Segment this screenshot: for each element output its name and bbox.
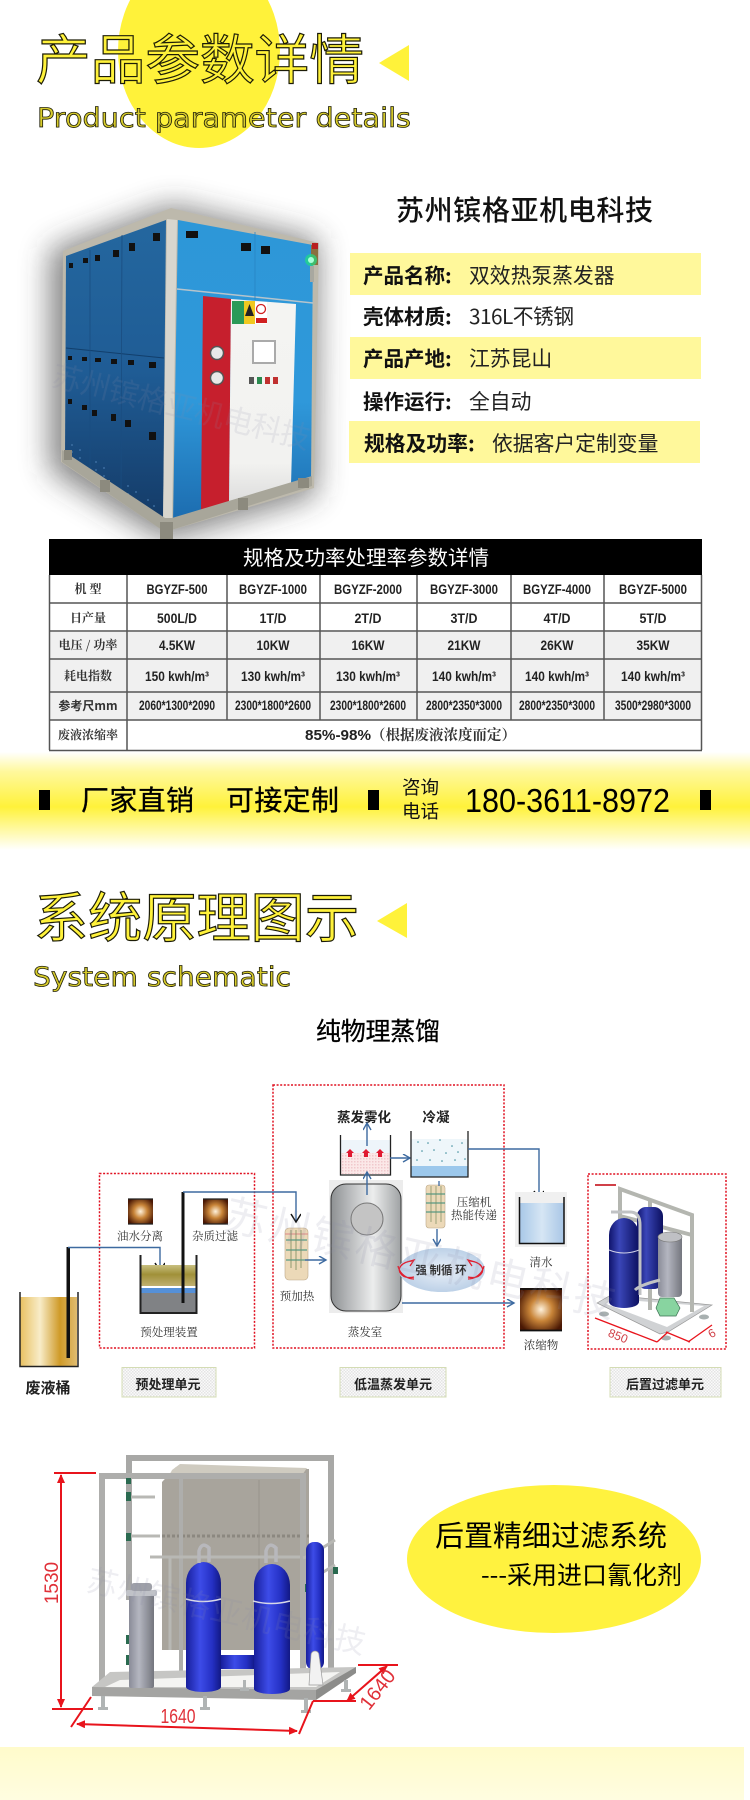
row: power consumption: 130 kwh/m³ [241,669,305,684]
arrow: preheater to evaporator [305,1259,326,1261]
row: power consumption: 130 kwh/m³ [336,669,400,684]
gray filter cylinder [658,1235,682,1297]
subtitle: system schematic: System schematic [33,962,291,993]
row: spec and power: 依据客户定制变量 [492,427,658,457]
parameter table [49,539,702,750]
contact banner [0,752,750,850]
base and feet [62,450,312,540]
row: spec and power: 规格及功率: [364,427,475,457]
row: daily output: 5T/D [640,611,667,626]
title: product parameter details: 产品参数详情 [36,16,364,95]
row: reference size [58,697,691,714]
row: daily output [70,609,667,626]
post filter machine [595,1185,719,1346]
decorative yellow circle [118,0,280,148]
row: voltage and power: 4.5KW [159,638,195,653]
flow line: condenser to clean water [468,1149,539,1199]
row: origin: 江苏昆山 [469,342,552,372]
row: concentration rate [58,724,516,745]
right blue face [173,220,313,523]
cabinet frame [61,208,319,532]
row: model: BGYZF-1000 [239,582,307,597]
upright frame [620,1189,692,1312]
product photo: evaporator cabinet [50,205,319,540]
row: power consumption: 140 kwh/m³ [621,669,685,684]
pressure gauges [210,346,224,384]
row: daily output: 500L/D [157,611,197,626]
watermarks: 苏州镔格亚机电科技 [83,1555,371,1663]
icon: title triangle [379,45,409,81]
row: reference size: 2800*2350*3000 [519,698,595,713]
row: operation [363,385,531,415]
waste liquid bucket: 废液桶 [25,1377,71,1398]
callout ellipse: post fine filter system [407,1485,701,1633]
gray filter column [126,1583,157,1688]
forced circulation ellipse: 强 制循 环 [415,1262,467,1278]
compressor heat transfer: 热能传递 [451,1207,497,1223]
row: reference size: 2300*1800*2600 [330,698,406,713]
signal tower light [305,243,318,282]
pretreatment tank: 预处理装置 [140,1324,198,1340]
row: product name: 双效热泵蒸发器 [469,259,615,289]
row: power consumption: 耗电指数 [64,667,112,684]
clean water tank: 清水 [530,1254,553,1270]
condenser: 冷凝 [422,1106,450,1126]
base frame [597,1295,712,1334]
row: voltage and power: 10KW [256,638,290,653]
callout ellipse: post fine filter system: 后置精细过滤系统 [435,1513,667,1555]
compressor heat transfer: 压缩机 [457,1194,492,1210]
left blue cylinder [186,1545,221,1692]
bottom pale yellow band [0,1747,744,1800]
evaporation chamber: 蒸发室 [348,1324,382,1340]
arrow: to concentrate [402,1302,514,1304]
row: origin: 产品产地: [363,342,452,372]
evaporation chamber [329,1180,403,1340]
phone number: 180-3611-8972 [465,782,670,819]
heading: pure physical distillation: 纯物理蒸馏 [316,1012,440,1048]
arrow: compressor down [436,1229,438,1246]
row: product name: 产品名称: [363,259,452,289]
table grid [49,575,702,750]
row: reference size: 3500*2980*3000 [615,698,691,713]
row: model: BGYZF-2000 [334,582,402,597]
process diagram [20,1085,726,1398]
row: reference size: 2060*1300*2090 [139,698,215,713]
row: model [74,580,687,597]
row: reference size: 参考尺mm [58,697,118,714]
row: power consumption [64,667,685,684]
row: voltage and power: 35KW [636,638,670,653]
banner slogan: 可接定制 [226,779,339,819]
control buttons [249,377,278,384]
post filter machine: 850 [606,1326,630,1346]
side pipes [127,1497,335,1650]
width dimension 1640 [71,1697,313,1734]
depth dimension 1640: 1640 [356,1666,400,1714]
impurity filter icon [192,1199,238,1244]
concentrate icon [520,1288,562,1353]
table header: 规格及功率处理率参数详情 [243,541,489,571]
row: product name [350,253,701,295]
machine shadow [50,205,318,540]
banner slogan: 厂家直销 [81,779,194,819]
row: daily output: 1T/D [260,611,287,626]
watermarks [48,351,623,1663]
banner bullets [39,790,711,810]
company name: 苏州镔格亚机电科技 [396,189,653,229]
row: power consumption: 150 kwh/m³ [145,669,209,684]
watermarks: 苏州镔格亚机电科技 [48,351,316,458]
row: model: 机 型 [74,580,102,597]
rear blue tank [637,1207,663,1289]
green pump [656,1298,680,1316]
red door panel [201,296,231,511]
icon: section triangle [377,903,407,938]
white pump [309,1651,323,1685]
watermarks: 苏州镔格亚机电科技 [219,1181,623,1331]
pretreatment dotted frame [100,1174,254,1348]
concentrate icon: 浓缩物 [524,1337,559,1353]
row: daily output: 4T/D [544,611,571,626]
row: shell material [363,300,574,330]
preheater: 预加热 [280,1288,315,1304]
post filter dotted frame [588,1174,726,1349]
subtitle: english: Product parameter details [37,103,411,134]
flow line: tank to preheater [183,1192,296,1222]
condenser [411,1106,468,1177]
row: operation: 全自动 [469,385,531,415]
row: daily output: 3T/D [450,611,478,626]
consult label: 电话 [402,798,439,824]
row: model: BGYZF-4000 [523,582,591,597]
unit label: post filter: 后置过滤单元 [626,1374,704,1393]
pipes [611,1212,660,1295]
evaporation atomizing chamber: 蒸发雾化 [337,1106,391,1126]
base platform [92,1667,356,1700]
row: shell material: 壳体材质: [363,300,452,330]
right blue cylinder [253,1545,290,1694]
green valves [126,1478,338,1665]
row: daily output: 2T/D [354,611,382,626]
main blue tank [609,1218,639,1308]
row: voltage and power [59,636,670,653]
row: voltage and power: 16KW [352,638,385,653]
banner slogan [81,779,339,819]
flow line: bucket to tank [68,1248,160,1271]
row: voltage and power: 电压 / 功率 [59,636,118,653]
unit label: post filter [610,1368,721,1397]
center blue drum [221,1655,255,1669]
unit label: pretreatment [122,1368,216,1397]
width dimension 1640: 1640 [160,1706,196,1728]
touch screen [253,341,275,363]
large gray tank [162,1464,309,1650]
white door panel [229,299,296,504]
arrow: to condenser [390,1157,410,1159]
row: power consumption: 140 kwh/m³ [432,669,496,684]
forced circulation ellipse [398,1248,485,1292]
front frame [102,1476,303,1690]
arrows: vapor rising [366,1123,368,1195]
row: voltage and power: 26KW [540,638,574,653]
left blue face [65,220,166,523]
feet [98,1680,351,1713]
height dimension 1530: 1530 [42,1562,63,1604]
row: model: BGYZF-5000 [619,582,687,597]
row: operation: 操作运行: [363,385,452,415]
unit label: pretreatment: 预处理单元 [135,1374,201,1393]
row: origin [350,337,701,379]
row: voltage and power: 21KW [448,638,481,653]
evaporation dotted frame [273,1085,504,1348]
row: reference size: 2800*2350*3000 [426,698,502,713]
row: concentration rate: （根据废液浓度而定） [371,724,516,745]
row: model: BGYZF-500 [146,582,208,597]
callout ellipse: post fine filter system: ---采用进口氰化剂 [481,1556,682,1592]
post filter machine: 6 [706,1325,719,1341]
pretreatment tank [140,1192,198,1340]
waste liquid bucket [20,1247,78,1398]
banner gradient background [0,752,750,850]
row: model: BGYZF-3000 [430,582,498,597]
impurity filter icon: 杂质过滤 [192,1228,238,1244]
preheater [280,1228,315,1304]
dimension lines [595,1318,712,1342]
back frame [129,1458,331,1675]
clean water tank [515,1192,567,1270]
feet [599,1312,709,1340]
spec list [349,253,701,463]
vents [68,231,270,440]
oil water separation icon [117,1199,163,1244]
row: concentration rate: 85%-98% [305,727,371,744]
consult label [402,774,439,824]
unit label: low temperature evaporation [340,1368,446,1397]
warning signs [232,301,267,324]
perforations [71,444,155,507]
row: power consumption: 140 kwh/m³ [525,669,589,684]
consult label: 咨询 [402,774,439,800]
evaporation atomizing chamber [337,1106,391,1175]
table header [49,539,702,575]
rear blue tank [306,1542,324,1670]
row: spec and power [349,421,700,463]
unit label: low temperature evaporation: 低温蒸发单元 [354,1374,432,1393]
title: system schematic: 系统原理图示 [34,874,359,953]
row: reference size: 2300*1800*2600 [235,698,311,713]
oil water separation icon: 油水分离 [117,1228,163,1244]
row: concentration rate: 废液浓缩率 [58,726,119,743]
depth dimension 1640 [313,1665,400,1714]
fine filter system machine [42,1458,400,1734]
compressor heat transfer [426,1181,497,1228]
row: shell material: 316L不锈钢 [469,300,574,330]
row: daily output: 日产量 [70,609,106,626]
